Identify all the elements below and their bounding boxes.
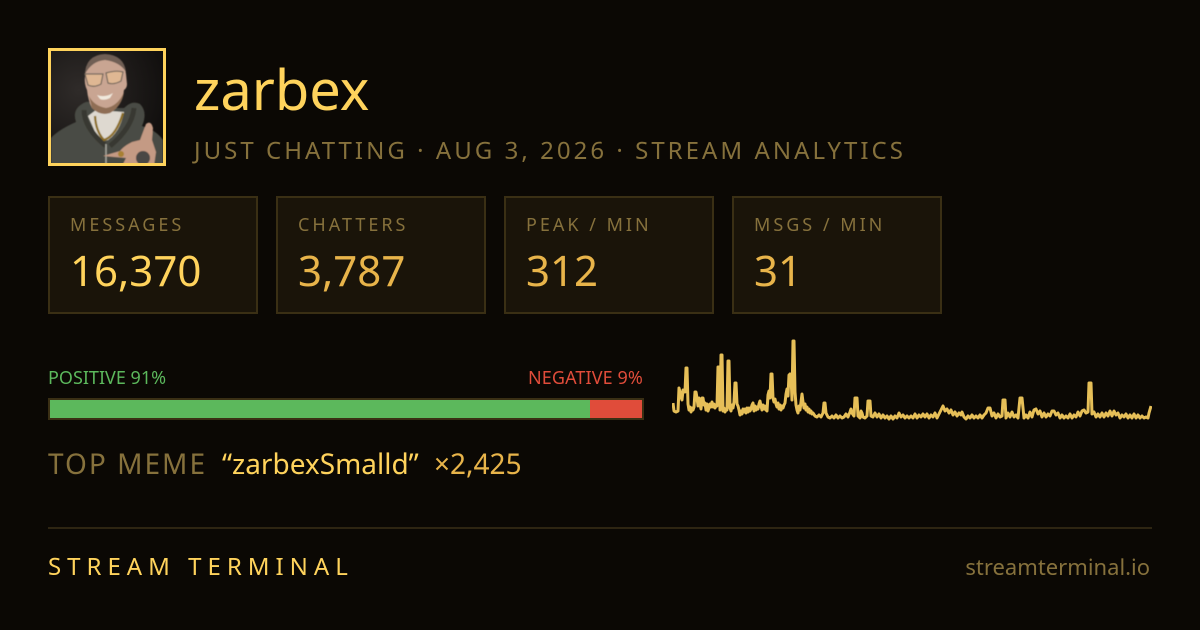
top meme count: ×2,425 <box>434 445 522 483</box>
positive label: POSITIVE 91% <box>48 366 166 390</box>
stat card: peak per minute: PEAK / MIN <box>526 213 652 237</box>
stat card: peak per minute: 312 <box>526 242 598 299</box>
stat card: messages <box>48 196 258 314</box>
stat card: messages: 16,370 <box>70 242 201 299</box>
stat card: chatters <box>276 196 486 314</box>
stat card: messages per minute: MSGS / MIN <box>754 213 885 237</box>
top meme name: “zarbexSmalld” <box>222 445 419 483</box>
url: streamterminal.io <box>965 552 1150 582</box>
top meme label: TOP MEME <box>48 445 207 483</box>
avatar photo <box>48 48 166 166</box>
activity sparkline <box>672 340 1152 421</box>
sentiment bar <box>48 398 644 420</box>
stat card: chatters: 3,787 <box>298 242 405 299</box>
stat card: chatters: CHATTERS <box>298 213 408 237</box>
stat card: messages: MESSAGES <box>70 213 184 237</box>
stat card: peak per minute <box>504 196 714 314</box>
stat card: messages per minute <box>732 196 942 314</box>
negative label: NEGATIVE 9% <box>528 366 643 390</box>
stat card: messages per minute: 31 <box>754 242 802 299</box>
subtitle: JUST CHATTING · AUG 3, 2026 · STREAM ANALYTICS <box>194 134 906 167</box>
username title: zarbex <box>194 51 369 127</box>
brand: STREAM TERMINAL <box>48 550 354 583</box>
